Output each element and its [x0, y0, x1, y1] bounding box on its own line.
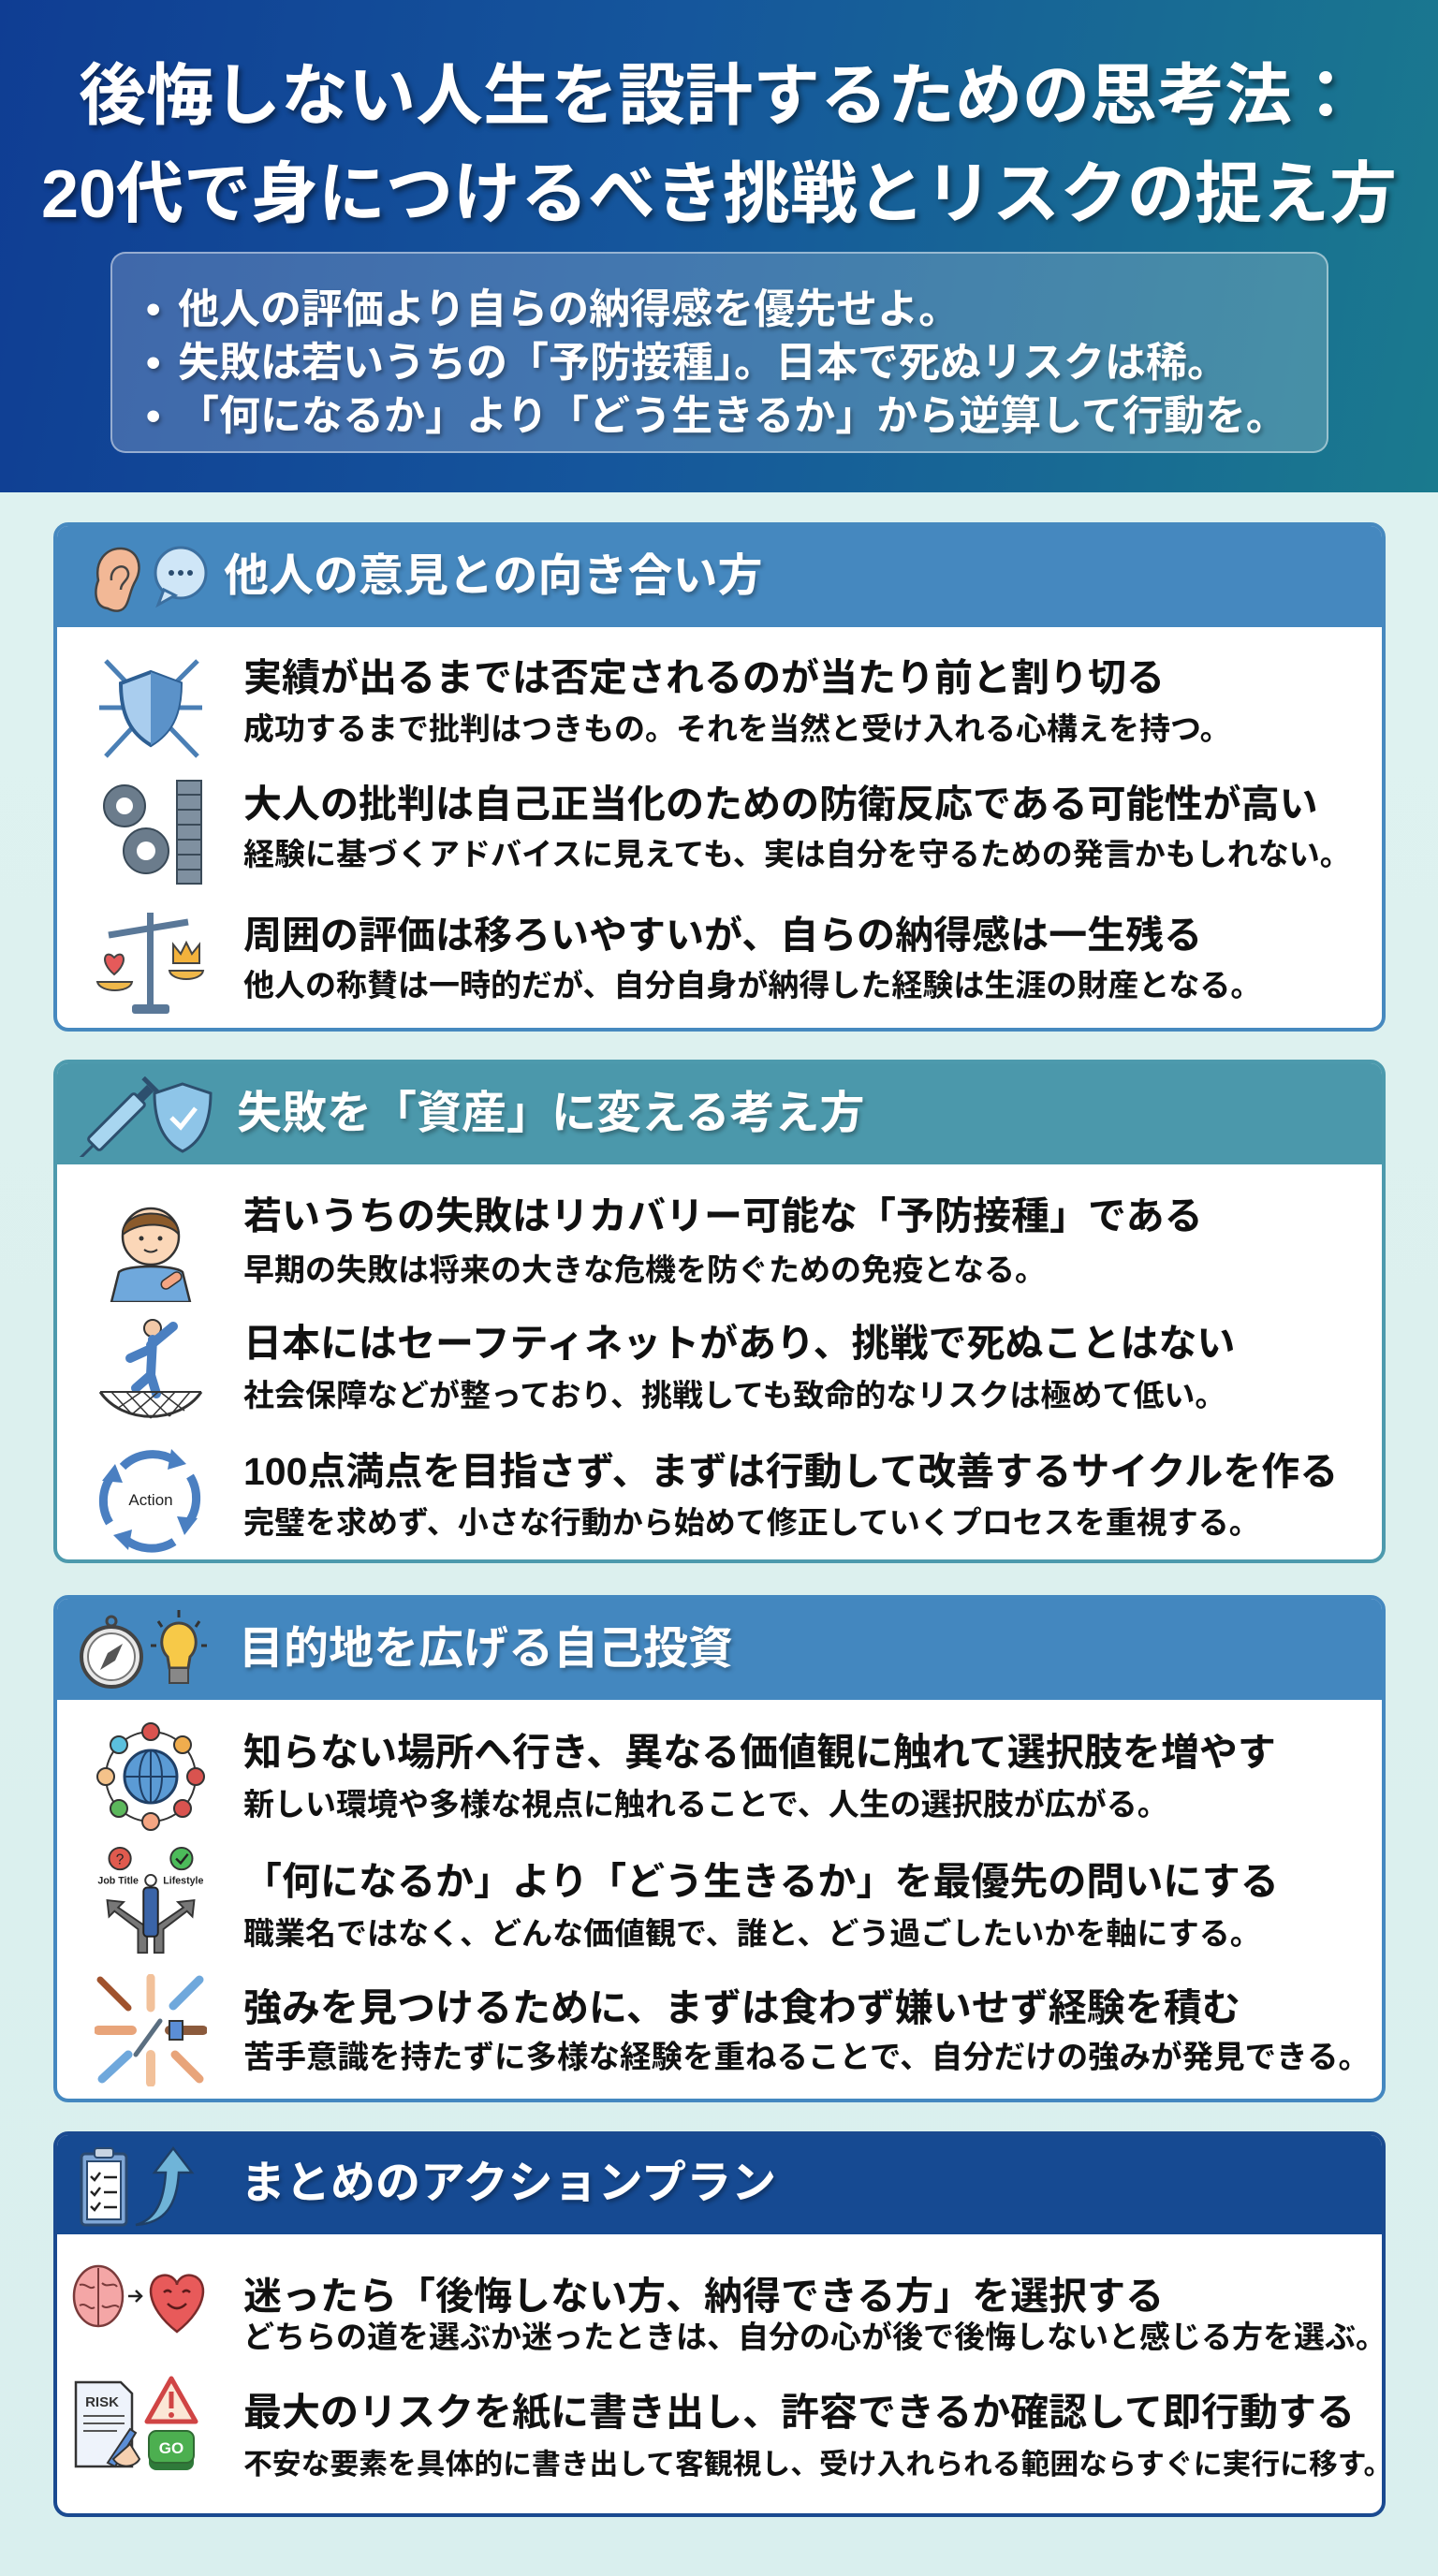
summary bullet box: •	[146, 340, 160, 386]
icon: shield with arrows	[99, 659, 202, 758]
item 1	[99, 656, 1231, 758]
item 3	[95, 1974, 1370, 2086]
subtext: どちらの道を選ぶか迷ったときは、自分の心が後で後悔しないと感じる方を選ぶ。	[243, 2320, 1386, 2354]
item 1	[96, 1722, 1276, 1831]
item 3	[99, 1449, 1338, 1553]
heading: 周囲の評価は移ろいやすいが、自らの納得感は一生残る	[243, 914, 1202, 957]
panel: turning failure into assets	[53, 1060, 1386, 1563]
icon: risk paper, warning, go button	[75, 2376, 198, 2470]
icon: action cycle	[99, 1449, 200, 1553]
icon: action cycle: Action	[128, 1491, 173, 1509]
heading: 強みを見つけるために、まずは食わず嫌いせず経験を積む	[243, 1986, 1240, 2029]
panel title: まとめのアクションプラン	[241, 2159, 776, 2208]
summary bullet box: 他人の評価より自らの納得感を優先せよ。	[178, 286, 960, 332]
panel header	[57, 2135, 1382, 2234]
header banner	[0, 0, 1438, 492]
heading: 日本にはセーフティネットがあり、挑戦で死ぬことはない	[243, 1322, 1235, 1365]
summary bullet box: •	[146, 286, 160, 332]
heading: 知らない場所へ行き、異なる価値観に触れて選択肢を増やす	[243, 1731, 1276, 1774]
icon: globe with people	[96, 1722, 205, 1831]
subtext: 完璧を求めず、小さな行動から始めて修正していくプロセスを重視する。	[243, 1505, 1260, 1540]
heading: 実績が出るまでは否定されるのが当たり前と割り切る	[243, 656, 1165, 699]
heading: 大人の批判は自己正当化のための防衛反応である可能性が高い	[243, 783, 1318, 826]
panel header	[57, 526, 1382, 627]
icon: person jumping on safety net	[99, 1319, 202, 1419]
title	[41, 59, 1399, 232]
item 1	[73, 2265, 1386, 2354]
icon: brain to heart	[73, 2265, 204, 2333]
panel header	[57, 1063, 1382, 1164]
icon: gears and wall	[103, 780, 202, 885]
panel title: 他人の意見との向き合い方	[224, 551, 763, 601]
heading: 100点満点を目指さず、まずは行動して改善するサイクルを作る	[243, 1450, 1338, 1493]
item 2	[75, 2376, 1386, 2481]
item 1	[110, 1194, 1203, 1302]
panel header	[57, 1599, 1382, 1700]
subtext: 成功するまで批判はつきもの。それを当然と受け入れる心構えを持つ。	[243, 711, 1231, 746]
subtext: 職業名ではなく、どんな価値観で、誰と、どう過ごしたいかを軸にする。	[243, 1916, 1261, 1951]
panel: dealing with others' opinions	[53, 522, 1386, 1032]
panel: action plan summary	[53, 2131, 1386, 2517]
icon: job title vs lifestyle fork	[97, 1847, 203, 1954]
icon: job title vs lifestyle fork: Lifestyle	[163, 1876, 203, 1887]
subtext: 早期の失敗は将来の大きな危機を防ぐための免疫となる。	[243, 1252, 1046, 1287]
item 2	[103, 780, 1351, 885]
icon: job title vs lifestyle fork: Job Title	[97, 1876, 139, 1887]
icon: boy with bandage	[110, 1208, 191, 1302]
panel title: 目的地を広げる自己投資	[239, 1624, 733, 1674]
summary bullet box	[110, 252, 1328, 453]
subtext: 新しい環境や多様な視点に触れることで、人生の選択肢が広がる。	[243, 1787, 1168, 1822]
icon: compass and light bulb	[80, 1610, 207, 1689]
icon: ear and speech bubble	[95, 547, 208, 612]
title: 後悔しない人生を設計するための思考法：	[79, 59, 1359, 134]
heading: 若いうちの失敗はリカバリー可能な「予防接種」である	[243, 1194, 1203, 1237]
item 2	[97, 1847, 1279, 1954]
heading: 迷ったら「後悔しない方、納得できる方」を選択する	[243, 2275, 1164, 2318]
title: 20代で身につけるべき挑戦とリスクの捉え方	[41, 157, 1397, 232]
subtext: 経験に基づくアドバイスに見えても、実は自分を守るための発言かもしれない。	[243, 837, 1351, 871]
icon: hands with tools	[95, 1974, 207, 2086]
subtext: 苦手意識を持たずに多様な経験を重ねることで、自分だけの強みが発見できる。	[243, 2041, 1370, 2075]
icon: job title vs lifestyle fork: ?	[116, 1852, 125, 1867]
icon: clipboard and up arrow	[81, 2146, 195, 2226]
subtext: 他人の称賛は一時的だが、自分自身が納得した経験は生涯の財産となる。	[243, 968, 1261, 1003]
icon: risk paper, warning, go button: RISK	[85, 2394, 119, 2410]
icon: risk paper, warning, go button: GO	[159, 2439, 183, 2457]
item 2	[99, 1319, 1235, 1419]
subtext: 社会保障などが整っており、挑戦しても致命的なリスクは極めて低い。	[243, 1378, 1225, 1412]
summary bullet box: 失敗は若いうちの「予防接種」。日本で死ぬリスクは稀。	[178, 340, 1228, 386]
summary bullet box: •	[146, 393, 160, 439]
item 3	[95, 913, 1261, 1014]
icon: scales with heart and crown	[95, 913, 204, 1014]
summary bullet box: 「何になるか」より「どう生きるか」から逆算して行動を。	[178, 393, 1287, 439]
heading: 最大のリスクを紙に書き出し、許容できるか確認して即行動する	[243, 2391, 1355, 2434]
panel: self-investment	[53, 1595, 1386, 2102]
heading: 「何になるか」より「どう生きるか」を最優先の問いにする	[243, 1860, 1279, 1903]
panel title: 失敗を「資産」に変える考え方	[237, 1089, 865, 1138]
icon: syringe and shield	[80, 1076, 212, 1157]
subtext: 不安な要素を具体的に書き出して客観視し、受け入れられる範囲ならすぐに実行に移す。	[243, 2448, 1386, 2481]
